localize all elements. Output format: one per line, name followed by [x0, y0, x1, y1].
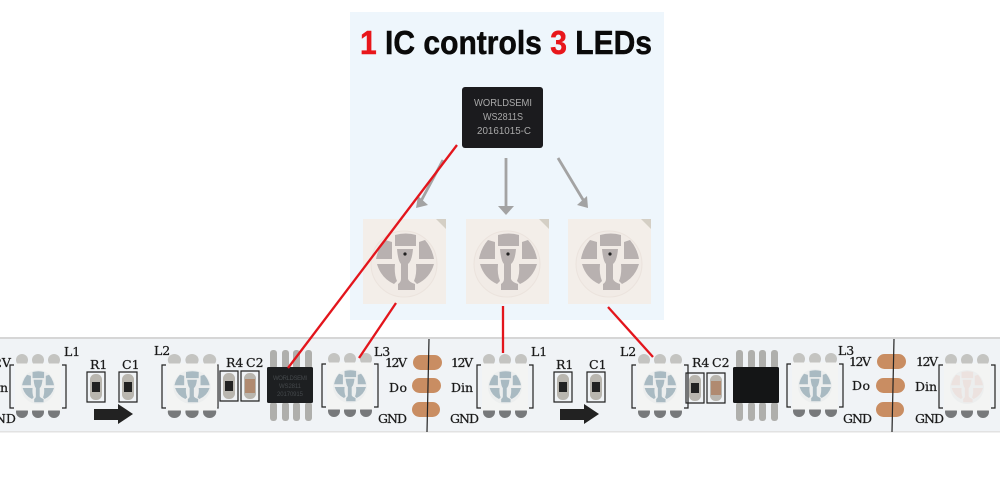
- LED L1 tile 1: [477, 354, 533, 418]
- icon: strip IC tile 0: WORLDSEMI: [273, 376, 307, 382]
- labels: tile 0 output: [378, 355, 408, 426]
- panel: LED strip: [0, 337, 1000, 432]
- labels: tile 1 output: GND: [843, 411, 872, 426]
- icon: WS2811S chip: WS2811S: [483, 112, 523, 123]
- labels: tile 0 components: L1: [64, 344, 80, 359]
- red connector: middle LED to L1: [502, 306, 504, 353]
- labels: tile 2 input: GND: [915, 411, 944, 426]
- red connector: right LED to L2: [608, 307, 653, 357]
- labels: tile 0 components: R4: [226, 355, 243, 370]
- labels: tile 0 components: L2: [154, 343, 170, 358]
- arrow: chip to left LED: [416, 160, 443, 208]
- resistor R1 tile 1: [554, 372, 572, 402]
- icon: WS2811S chip: WORLDSEMI: [474, 98, 532, 109]
- arrow: chip to right LED: [558, 158, 588, 208]
- icon: large LED middle: [466, 219, 549, 304]
- LED L3 tile 1: [787, 353, 843, 417]
- arrow: chip to middle LED: [498, 158, 514, 215]
- capacitor C1 tile 0: [119, 372, 137, 402]
- labels: tile 1 input: Din: [451, 380, 473, 395]
- arrow: data direction tile 1: [560, 404, 599, 424]
- LED L3 tile 0: [322, 353, 378, 417]
- labels: tile 1 components: L1: [531, 344, 547, 359]
- title: 1 IC controls 3 LEDs: [360, 24, 652, 61]
- labels: tile 1 input: [450, 355, 479, 426]
- red connector: left LED to L3: [359, 303, 396, 358]
- arrow: data direction tile 0: [94, 404, 133, 424]
- icon: strip IC tile 0: 20170915: [277, 392, 304, 398]
- labels: tile 1 output: 12V: [849, 354, 872, 369]
- resistor R4 tile 1: [686, 373, 704, 403]
- labels: tile 0 components: R1: [90, 357, 107, 372]
- labels: tile 0 output: Do: [389, 380, 407, 395]
- red connector: chip to strip IC: [288, 145, 457, 368]
- icon: strip IC tile 1: [733, 350, 779, 421]
- labels: tile 1 components: R4: [692, 355, 709, 370]
- labels: tile 0 components: C1: [122, 357, 140, 372]
- capacitor C2 tile 0: [241, 371, 259, 401]
- labels: tile 1 components: L3: [838, 343, 854, 358]
- labels: tile 1 components: C1: [589, 357, 607, 372]
- labels: tile 0 components: C2: [246, 355, 264, 370]
- panel: 1 IC controls 3 LEDs diagram: [350, 12, 664, 320]
- labels: tile 1 components: [531, 343, 854, 372]
- solder pads 2: [876, 354, 906, 417]
- labels: tile 1 input: 12V: [451, 355, 474, 370]
- icon: large LED right: [568, 219, 651, 304]
- cut lines over pads: [427, 339, 894, 432]
- labels: tile 0 output: 12V: [385, 355, 408, 370]
- labels: tile 1 components: L2: [620, 344, 636, 359]
- icon: strip IC tile 0: [267, 350, 313, 421]
- resistor R4 tile 0: [220, 371, 238, 401]
- labels: tile 0 partial left: [0, 355, 16, 426]
- labels: tile 0 output: GND: [378, 411, 407, 426]
- icon: WS2811S chip: [462, 87, 543, 148]
- icon: large LED left: [363, 219, 446, 304]
- labels: tile 2 input: Din: [915, 379, 937, 394]
- labels: tile 2 input: [915, 354, 944, 426]
- labels: tile 1 components: R1: [556, 357, 573, 372]
- LED L2 tile 0: [162, 354, 218, 418]
- capacitor C1 tile 1: [587, 372, 605, 402]
- solder pads 1: [412, 355, 442, 417]
- LED L1 tile 0: [10, 354, 66, 418]
- capacitor C2 tile 1: [707, 373, 725, 403]
- labels: tile 1 output: [843, 354, 872, 426]
- labels: tile 0 components: L3: [374, 344, 390, 359]
- LED L1 tile 2: [939, 354, 995, 418]
- labels: tile 1 components: C2: [712, 355, 730, 370]
- labels: tile 1 input: GND: [450, 411, 479, 426]
- labels: tile 2 input: 12V: [916, 354, 939, 369]
- icon: WS2811S chip: 20161015-C: [477, 126, 531, 137]
- resistor R1 tile 0: [87, 372, 105, 402]
- labels: tile 0 components: [64, 343, 390, 372]
- LED L2 tile 1: [632, 354, 688, 418]
- labels: tile 1 output: Do: [852, 378, 870, 393]
- icon: strip IC tile 0: WS2811: [279, 384, 302, 390]
